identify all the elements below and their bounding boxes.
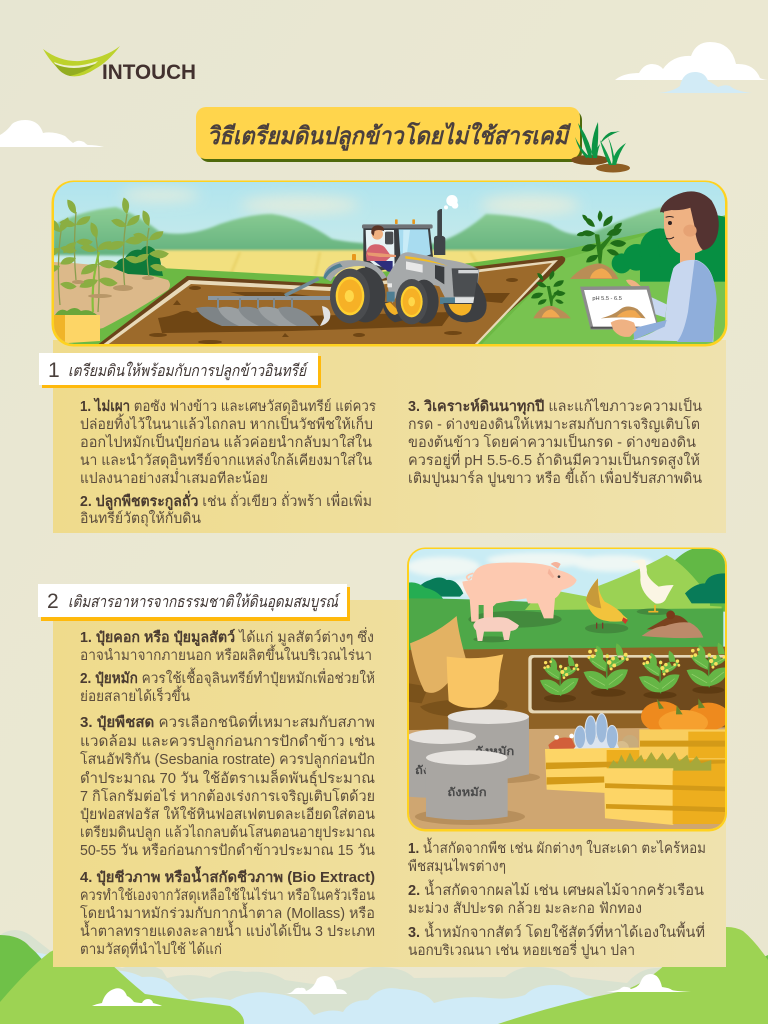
section 1 text left: อินทรีย์วัตถุให้กับดิน [80, 509, 201, 527]
yellow crate [53, 315, 100, 344]
section 1 text left: นา และนำวัสดุอินทรีย์จากแหล่งใกล้เคียงมาใส่ใน [80, 451, 372, 469]
hen [586, 578, 628, 622]
right hill: bushes, plants and man: pH 5.5 - 6.5 [592, 296, 622, 302]
section 2 text left: เตรียมดินปลูก แล้วไถกลบต้นโสนตอนอายุประมาณ [80, 823, 375, 841]
section 2 text left: แวดล้อม และควรปลูกก่อนการปักดำข้าว เช่น [80, 733, 375, 750]
section 1 text right [408, 396, 702, 487]
section 2 text left [80, 627, 375, 958]
hero illustration: ploughing the field [43, 180, 743, 346]
cloud left [0, 120, 104, 147]
section 2 text right: พืชสมุนไพรต่างๆ [408, 857, 506, 875]
plough [196, 277, 330, 326]
panel: section 1 background [53, 340, 726, 533]
section 2 text left: ปุ๋ยฟอสฟอรัส ให้ใช้หินฟอสเฟตบดละเอียดใส่ตอน [80, 805, 375, 823]
driver [372, 230, 383, 240]
section 2 text right [408, 837, 706, 959]
section 2 text left: น้ำตาลทรายแดงละลายน้ำ แบ่งได้เป็น 3 ประเภท [80, 920, 375, 940]
section 1 text left: แปลงนาอย่างสม่ำเสมอทีละน้อย [80, 468, 268, 487]
flowering plants [540, 643, 730, 702]
section 2 text left: 2. ปุ๋ยหมัก ควรใช้เชื้อจุลินทรีย์ทำปุ๋ยหมักเพื่อช่วยให้ [80, 667, 375, 687]
section 2 text left: 4. ปุ๋ยชีวภาพ หรือน้ำสกัดชีวภาพ (Bio Extract) [80, 866, 375, 886]
pig [462, 562, 577, 622]
front wheel [418, 280, 439, 324]
section 2 heading: 2 [47, 590, 59, 613]
piglet [473, 617, 519, 641]
section 2 text left: ควรทำใช้เองจากวัสดุเหลือใช้ในไร่นา หรือในครัวเรือน [80, 886, 375, 904]
fish [574, 737, 619, 749]
pumpkin crate [639, 729, 726, 759]
title banner: วิธีเตรียมดินปลูกข้าวโดยไม่ใช้สารเคมี [207, 121, 572, 151]
pumpkins [640, 698, 725, 730]
logo: Intouch: INTOUCH [102, 61, 196, 84]
section 1 text left: 1. ไม่เผา ตอซัง ฟางข้าว และเศษวัสดุอินทรีย์ แต่ควร [80, 397, 376, 415]
section 1 heading: 1 [48, 359, 60, 382]
section 1 heading: เตรียมดินให้พร้อมกับการปลูกข้าวอินทรีย์ [68, 361, 309, 381]
dark bush behind field plants [113, 246, 163, 276]
section 2 text right: 2. น้ำสกัดจากผลไม้ เช่น เศษผลไม้จากครัวเรือน [408, 879, 704, 899]
section 2 text left: ดำประมาณ 70 วัน ใช้อัตราเมล็ดพันธุ์ประมาณ [80, 768, 375, 787]
section 1 text left [80, 397, 376, 527]
section 2 text left: 7 กิโลกรัมต่อไร่ หากต้องเร่งการเจริญเติบโตด้วย [80, 787, 375, 805]
sacks [410, 616, 466, 693]
farm illustration: natural fertilisers: ถังหมัก [447, 786, 487, 799]
farm illustration: natural fertilisers: ถังหมัก [415, 764, 454, 777]
section 2 text right: 3. น้ำหมักจากสัตว์ โดยใช้สัตว์ที่หาได้เองในพื้นที่ [408, 921, 705, 941]
compost mounds [647, 615, 693, 629]
middle hidden wheel [383, 302, 403, 322]
section 2 text left: 50-55 วัน หรือก่อนการปักดำข้าวประมาณ 15 วัน [80, 842, 375, 859]
snail [622, 735, 638, 748]
section 1 text right: กรด - ด่างของดินให้เหมาะสมกับการเจริญเติบโต [408, 415, 700, 433]
tablet [580, 286, 659, 330]
far arm behind tablet [652, 297, 666, 318]
section 2 text left: 3. ปุ๋ยพืชสด ควรเลือกชนิดที่เหมาะสมกับสภาพ [80, 712, 375, 731]
section 1 text left: ปล่อยทิ้งไว้ในนาแล้วไถกลบ หากเป็นวัชพืชให้เก็บ [80, 413, 373, 433]
section 2 text left: ตามวัสดุที่นำไปใช้ ได้แก่ [80, 939, 222, 958]
logo: Intouch [43, 46, 196, 84]
far wheel [443, 282, 487, 322]
section 2 heading: เติมสารอาหารจากธรรมชาติให้ดินอุดมสมบูรณ์ [68, 592, 341, 612]
section 1 text right: ของต้นข้าว โดยค่าความเป็นกรด - ด่างของดิน [408, 432, 696, 451]
farm illustration: natural fertilisers [407, 548, 730, 832]
section 2 text left: 1. ปุ๋ยคอก หรือ ปุ๋ยมูลสัตว์ ได้แก่ มูลสัตว์ต่างๆ ซึ่ง [80, 627, 374, 646]
section 1 text left: ออกไปหมักเป็นปุ๋ยก่อน แล้วค่อยนำกลับมาใส่ใน [80, 432, 372, 451]
body [323, 260, 387, 281]
man [680, 253, 695, 263]
section 1 text left: 2. ปลูกพืชตระกูลถั่ว เช่น ถั่วเขียว ถั่วพร้า เพื่อเพิ่ม [80, 490, 372, 510]
section 2 text left: ย่อยสลายได้เร็วขึ้น [80, 685, 190, 705]
goose [631, 559, 674, 604]
section 1 text right: ควรอยู่ที่ pH 5.5-6.5 ถ้าดินมีความเป็นกรดสูงให้ [408, 450, 700, 469]
soil [408, 647, 725, 730]
panel: section 2 background [53, 600, 726, 967]
section 2 text right: 1. น้ำสกัดจากพืช เช่น ผักต่างๆ ใบสะเดา ตะไคร้หอม [408, 837, 706, 857]
title banner [196, 107, 582, 162]
section 2 text left: โสนอัฟริกัน (Sesbania rostrate) ควรปลูกก่อนปัก [80, 750, 375, 768]
section 1 heading [39, 353, 321, 388]
right hill: bushes, plants and man [530, 191, 743, 342]
section 2 text left: อาจนำมาจากภายนอก หรือผลิตขึ้นในบริเวณไร่นา [80, 644, 372, 664]
brown field [96, 256, 565, 346]
compost bins [508, 774, 540, 783]
section 1 text right: 3. วิเคราะห์ดินนาทุกปี และแก้ไขภาวะความเป็น [408, 396, 702, 415]
tractor [323, 195, 487, 324]
section 2 text left: โดยนำมาหมักร่วมกับกากน้ำตาล (Mollass) หรือ [80, 902, 375, 922]
farm illustration: natural fertilisers: ถังหมัก [475, 745, 514, 758]
section 1 text right: เติมปูนมาร์ล ปูนขาว หรือ ขี้เถ้า เพื่อปรับสภาพดิน [408, 467, 702, 487]
section 2 text right: นอกบริเวณนา เช่น หอยเชอรี่ ปูนา ปลา [408, 940, 635, 959]
small crate [545, 748, 640, 793]
clouds top right [615, 42, 768, 93]
rear wheel [356, 268, 386, 322]
bottom landscape [0, 927, 768, 1024]
icon: rice seedlings [571, 122, 630, 172]
section 2 text right: มะม่วง สัปปะรด กล้วย มะละกอ ฟักทอง [408, 900, 642, 917]
straw crate [608, 752, 712, 771]
section 2 heading [38, 584, 350, 621]
plants left [43, 198, 169, 312]
crab [548, 738, 576, 749]
